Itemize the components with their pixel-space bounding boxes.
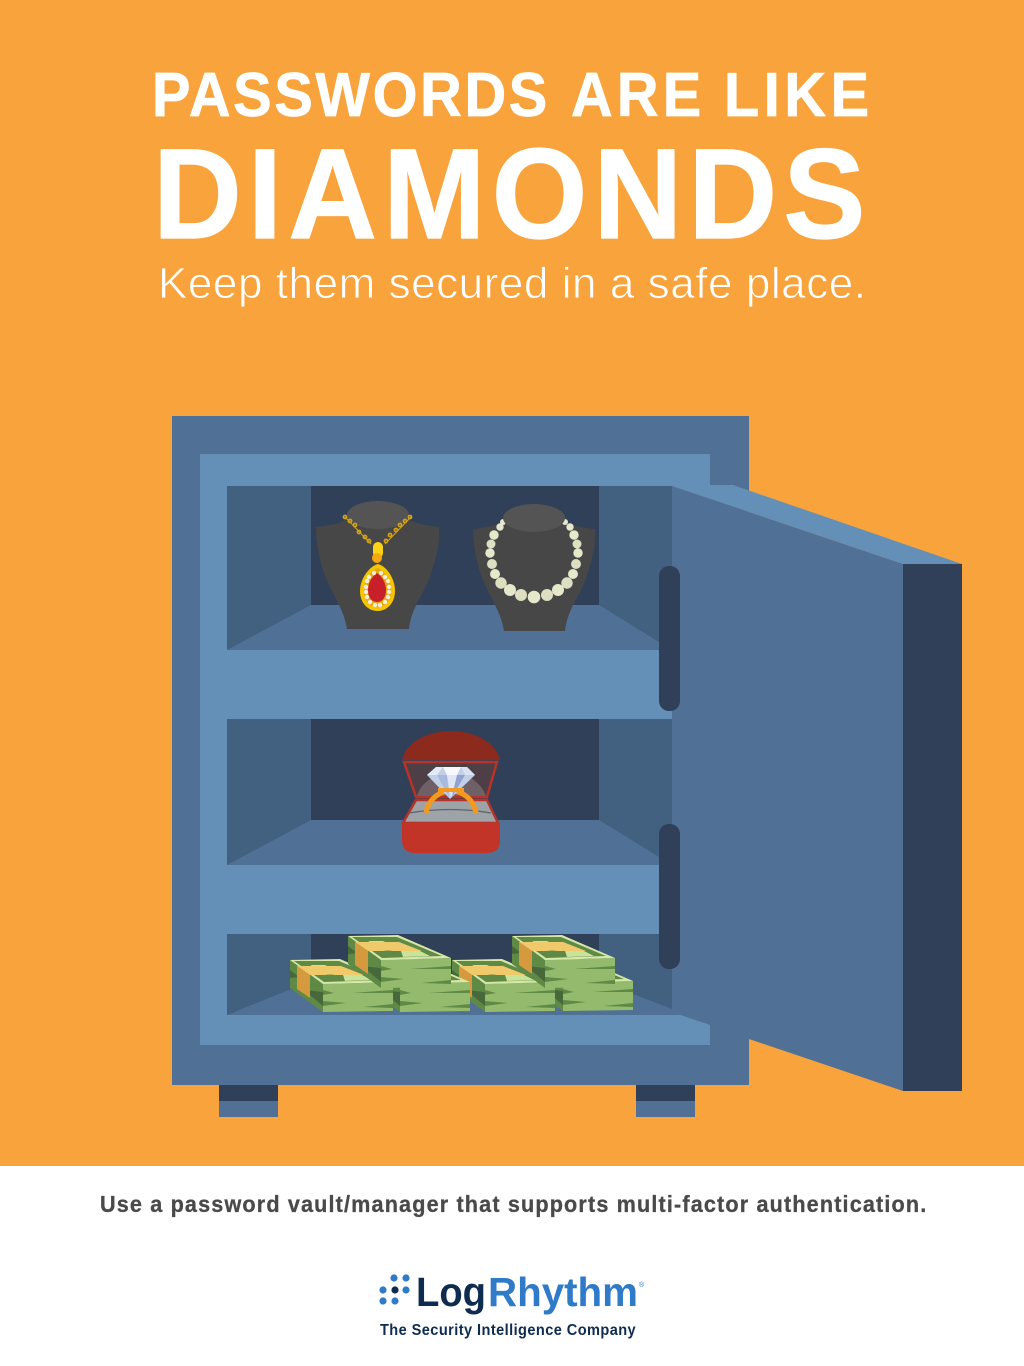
necklace on bust: pearls xyxy=(473,504,595,631)
logo dots xyxy=(379,1274,410,1305)
heading: passwords are like xyxy=(152,60,869,129)
logo wordmark: ® xyxy=(639,1281,645,1289)
logo tagline: The Security Intelligence Company xyxy=(380,1322,636,1339)
heading: passwords are like: PASSWORDS xyxy=(152,60,547,129)
necklace on bust: ruby pendant xyxy=(316,501,439,629)
safe body xyxy=(172,416,749,1085)
heading: passwords are like: ARE xyxy=(571,60,701,129)
logo wordmark: Rhythm xyxy=(488,1269,638,1315)
door face xyxy=(672,486,903,1091)
lower handle xyxy=(659,824,680,969)
compartment: middle xyxy=(227,719,672,865)
ring box with diamond xyxy=(402,731,500,853)
door side xyxy=(903,564,962,1091)
door frame edge xyxy=(672,485,962,564)
LogRhythm logo xyxy=(379,1269,645,1339)
title block xyxy=(152,60,869,308)
heading: passwords are like: LIKE xyxy=(724,60,869,129)
white footer panel xyxy=(0,1166,1024,1366)
stacks of cash xyxy=(290,935,633,1012)
safe door xyxy=(659,485,962,1091)
footer advice text: Use a password vault/manager that supports multi-factor authentication. xyxy=(100,1191,926,1217)
upper handle xyxy=(659,566,680,711)
logo wordmark: Log xyxy=(416,1269,486,1315)
compartment: top xyxy=(227,486,672,650)
subtitle: Keep them secured in a safe place. xyxy=(158,259,866,308)
compartment: bottom xyxy=(227,934,680,1015)
illustration: open safe xyxy=(172,416,962,1117)
heading: diamonds: DIAMONDS xyxy=(153,122,865,266)
logo wordmark xyxy=(416,1269,645,1315)
safe inner frame xyxy=(200,454,710,1045)
safe feet xyxy=(219,1085,695,1117)
